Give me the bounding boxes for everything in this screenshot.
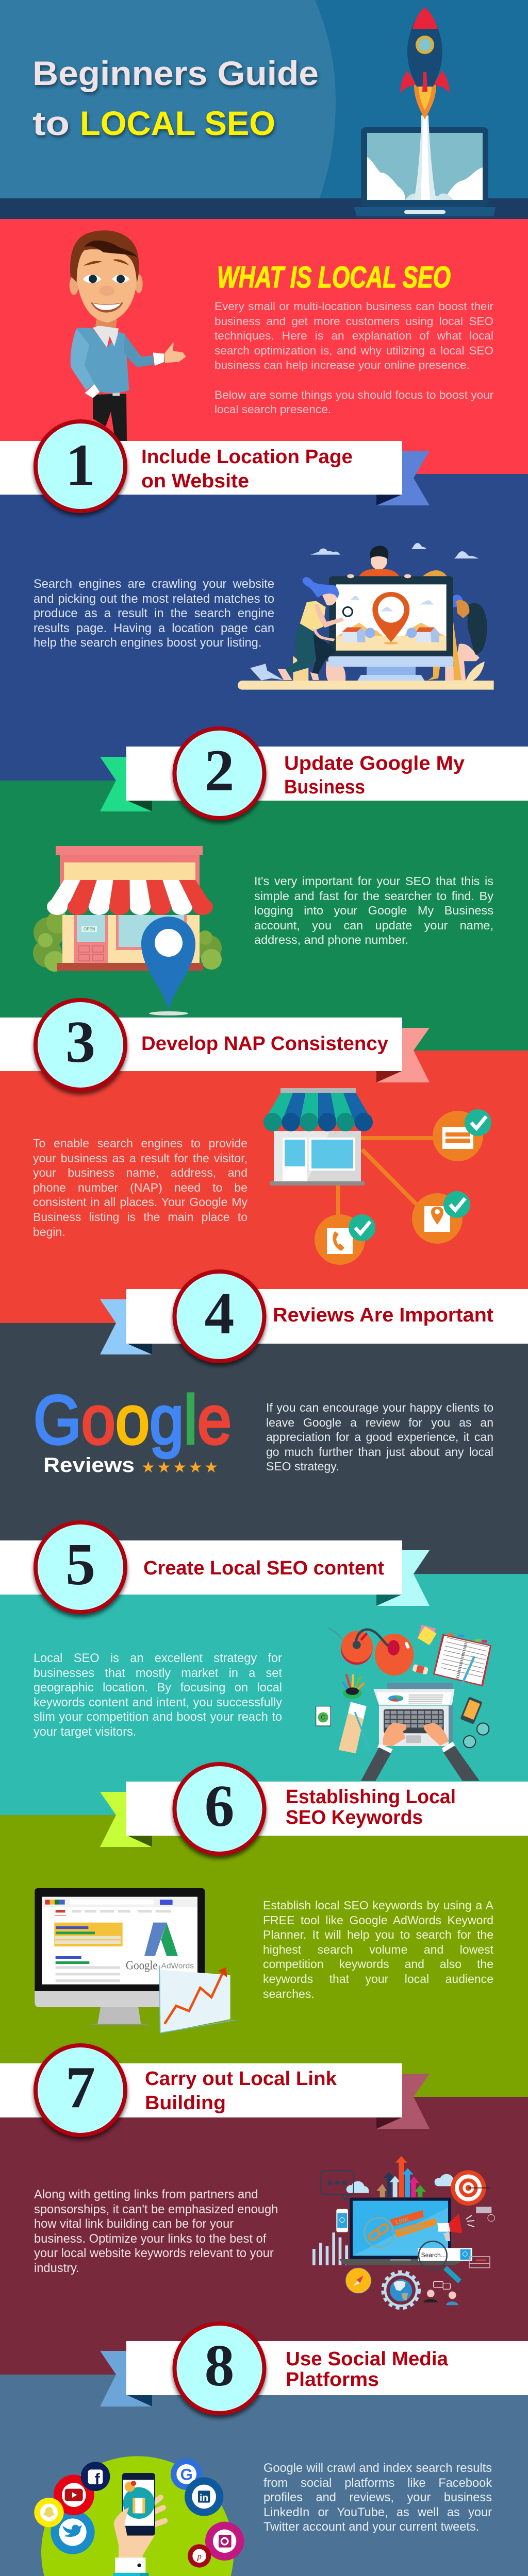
text: step 7 body: how vital link building can be for your <box>34 2217 234 2231</box>
number badge 2: 2 <box>204 738 234 804</box>
text: step 8 body: from social platforms like Facebook <box>263 2477 492 2490</box>
heading 8 <box>286 2348 449 2391</box>
heading 6 <box>286 1786 456 1828</box>
panel: step 4 reviews are important <box>0 1272 528 1574</box>
heading 8: Use Social Media <box>286 2348 449 2370</box>
text: step 7 body: sponsorships, it can't be emphasized enough <box>34 2203 278 2216</box>
heading 1 <box>141 446 353 492</box>
text: step 5 body: slim your competition and boost your reach to <box>34 1710 282 1724</box>
illustration: shop connected to name address phone <box>263 1088 491 1265</box>
illustration: hand holding phone with social icons: f <box>95 2471 101 2488</box>
text: step 6 body: keywords that your local audience <box>263 1972 493 1986</box>
text: step 2 body: simple and fast for the searcher to find. By <box>254 889 493 903</box>
illustration: link building laptop with icons: BUILDING <box>399 2223 426 2235</box>
title: Beginners Guide <box>32 54 319 92</box>
text: step 8 body: profiles and reviews, your business <box>263 2491 492 2504</box>
text: step 2 body: address, and phone number. <box>254 933 408 946</box>
heading 6: Establishing Local <box>286 1786 456 1808</box>
illustration: people around monitor with map pin <box>238 543 494 690</box>
illustration: monitor with google adwords and growth chart <box>35 1888 236 2033</box>
text: step 5 body: businesses that mostly market in a set <box>34 1667 282 1680</box>
text: step 3 body: To enable search engines to provide <box>33 1137 248 1150</box>
text: step 3 body: your business name, address, and <box>33 1166 248 1179</box>
ribbon 7 <box>0 2063 430 2129</box>
number badge 8: 8 <box>204 2333 234 2399</box>
heading 2: Update Google My <box>284 753 465 774</box>
text: what is local SEO intro: search optimization is, and why utilizing a local SEO <box>214 344 493 357</box>
illustration: monitor with google adwords and growth chart: Google <box>126 1959 158 1973</box>
title: to <box>32 104 70 142</box>
text: step 7 body: business. Optimize your links to the best of <box>34 2232 266 2246</box>
text: step 8 body <box>263 2462 492 2534</box>
heading 5: Create Local SEO content <box>143 1557 384 1579</box>
text: step 1 body <box>34 578 274 650</box>
heading 1: on Website <box>141 470 249 492</box>
text: step 3 body: consistent in all places. Your Google My <box>33 1195 248 1209</box>
text: step 4 body: SEO strategy. <box>266 1460 339 1473</box>
text: step 6 body: highest search volume and lowest <box>263 1943 493 1956</box>
heading 6: SEO Keywords <box>286 1807 423 1828</box>
text: step 1 body: help the search engines boost your listing. <box>34 636 261 650</box>
text: step 6 body <box>263 1899 493 2001</box>
icon: cartoon man presenting <box>70 230 186 441</box>
illustration: hand holding phone with social icons: p <box>196 2551 202 2561</box>
number badge 4: 4 <box>204 1281 234 1347</box>
text: step 5 body: keywords content and intent, you successfully <box>34 1696 282 1709</box>
heading 7: Building <box>145 2092 226 2114</box>
text: step 6 body: Establish local SEO keywords by using a A <box>263 1899 493 1912</box>
panel: step 6 establishing local SEO keywords <box>0 1764 528 2097</box>
text: step 8 body: Google will crawl and index search results <box>263 2462 492 2475</box>
heading 8: Platforms <box>286 2369 379 2391</box>
text: what is local SEO intro: business can help increase your online presence. <box>214 359 470 371</box>
logo: google reviews with stars: Reviews <box>43 1454 135 1477</box>
number badge 4 <box>174 1272 264 1361</box>
text: step 7 body: your local website keywords relevant to your <box>34 2247 274 2260</box>
text: what is local SEO intro <box>214 300 493 416</box>
illustration: monitor with google adwords and growth chart: AdWords <box>161 1962 194 1971</box>
panel: step 8 use social media platforms <box>0 2324 528 2576</box>
icon: rocket launching from laptop <box>354 7 496 216</box>
text: step 2 body <box>254 874 493 946</box>
illustration: hand holding phone with social icons: G <box>180 2465 193 2483</box>
text: step 3 body: phone number (NAP) need to be <box>33 1181 248 1194</box>
text: step 7 body <box>34 2188 278 2275</box>
text: step 5 body: geographic location. By focusing on local <box>34 1681 282 1694</box>
title: LOCAL SEO <box>80 104 275 142</box>
text: step 2 body: It's very important for your SEO that this is <box>254 874 493 888</box>
text: step 3 body <box>33 1137 248 1239</box>
text: step 1 body: Search engines are crawling your website <box>34 578 274 591</box>
text: step 5 body <box>34 1652 282 1739</box>
text: step 1 body: and picking out the most related matches to <box>34 592 274 606</box>
panel: step 5 create local SEO content <box>0 1522 528 1815</box>
illustration: link building laptop with icons: LINK <box>395 2216 410 2226</box>
number badge 3 <box>36 1000 125 1090</box>
ribbon 3 <box>0 1018 430 1082</box>
ribbon 4 <box>100 1289 528 1354</box>
logo: google reviews with stars: ★★★★★ <box>141 1459 218 1477</box>
ribbon 2 <box>100 747 528 811</box>
illustration: storefront with location pin: OPEN <box>84 927 95 931</box>
text: step 6 body: competition keywords and also the <box>263 1957 493 1971</box>
text: step 5 body: Local SEO is an excellent strategy for <box>34 1652 282 1665</box>
illustration: link building laptop with icons: Search... <box>421 2251 446 2259</box>
panel: step 3 develop NAP consistency <box>0 1000 528 1323</box>
heading 2: Business <box>284 776 365 798</box>
heading: what is local SEO: WHAT IS LOCAL SEO <box>217 261 451 294</box>
ribbon 6 <box>100 1782 528 1847</box>
number badge 7 <box>36 2045 125 2135</box>
panel: header <box>0 0 528 219</box>
heading 4: Reviews Are Important <box>273 1304 493 1326</box>
heading 2 <box>284 753 465 798</box>
number badge 3: 3 <box>65 1009 95 1075</box>
number badge 6 <box>174 1764 264 1854</box>
text: step 6 body: Planner. It will help you to search for the <box>263 1928 493 1941</box>
logo: google reviews with stars: Google <box>34 1382 232 1459</box>
illustration: workspace with laptop and headphones: C <box>321 1714 325 1721</box>
number badge 5: 5 <box>65 1532 95 1598</box>
text: step 4 body: appreciation for a good experience, it can <box>266 1430 493 1444</box>
illustration: link building laptop with icons <box>312 2156 494 2308</box>
text: step 4 body: If you can encourage your happy clients to <box>266 1401 493 1414</box>
panel: what is local SEO <box>0 219 528 474</box>
text: what is local SEO intro: local search presence. <box>214 403 331 416</box>
text: step 2 body: account, you can update your name, <box>254 919 493 932</box>
ribbon 5 <box>0 1540 430 1606</box>
heading 1: Include Location Page <box>141 446 353 468</box>
text: what is local SEO intro: techniques. Here is an explanation of what local <box>214 329 493 342</box>
number badge 1: 1 <box>65 432 95 498</box>
text: step 8 body: Twitter account and your current tweets. <box>263 2520 479 2534</box>
text: step 4 body: leave Google a review for you as an <box>266 1416 493 1429</box>
illustration: storefront with location pin <box>33 846 222 1015</box>
text: step 8 body: LinkedIn or YouTube, as well as your <box>263 2506 492 2519</box>
heading 7 <box>145 2068 337 2114</box>
ribbon 1 <box>0 441 430 505</box>
text: step 1 body: results page. Having a location page can <box>34 622 274 635</box>
text: step 5 body: your target visitors. <box>34 1725 136 1739</box>
text: step 4 body: go much further than just about any local <box>266 1445 493 1459</box>
text: step 3 body: Business listing is the main place to <box>33 1210 248 1224</box>
text: step 6 body: searches. <box>263 1987 315 2001</box>
text: step 4 body <box>266 1401 493 1473</box>
text: step 3 body: begin. <box>33 1225 65 1239</box>
text: step 7 body: industry. <box>34 2262 79 2275</box>
text: what is local SEO intro: business and get more customers using local SEO <box>214 315 493 328</box>
number badge 8 <box>174 2324 264 2413</box>
illustration: hand holding phone with social icons: in <box>200 2493 208 2504</box>
number badge 2 <box>174 728 264 818</box>
panel: step 2 update google my business <box>0 728 528 1050</box>
title <box>32 54 319 142</box>
ribbon 8 <box>100 2341 528 2406</box>
panel: step 1 include location page <box>0 421 528 781</box>
text: step 7 body: Along with getting links from partners and <box>34 2188 258 2201</box>
text: what is local SEO intro: Below are some things you should focus to boost your <box>214 388 493 401</box>
illustration: hand holding phone with social icons <box>34 2456 244 2576</box>
text: step 1 body: produce as a result in the search engine <box>34 607 274 620</box>
text: step 3 body: your business as a result for the visitor, <box>33 1151 248 1165</box>
illustration: workspace with laptop and headphones <box>316 1625 491 1781</box>
number badge 7: 7 <box>65 2055 95 2121</box>
panel: step 7 carry out local link building <box>0 2045 528 2375</box>
heading 7: Carry out Local Link <box>145 2068 337 2090</box>
number badge 1 <box>36 421 125 511</box>
heading 3: Develop NAP Consistency <box>141 1033 388 1055</box>
number badge 5 <box>36 1522 125 1612</box>
number badge 6: 6 <box>204 1773 234 1839</box>
text: step 2 body: logging into your Google My Business <box>254 904 493 917</box>
text: step 6 body: FREE tool like Google AdWords Keyword <box>263 1913 493 1927</box>
text: what is local SEO intro: Every small or multi-location business can boost their <box>214 300 493 313</box>
